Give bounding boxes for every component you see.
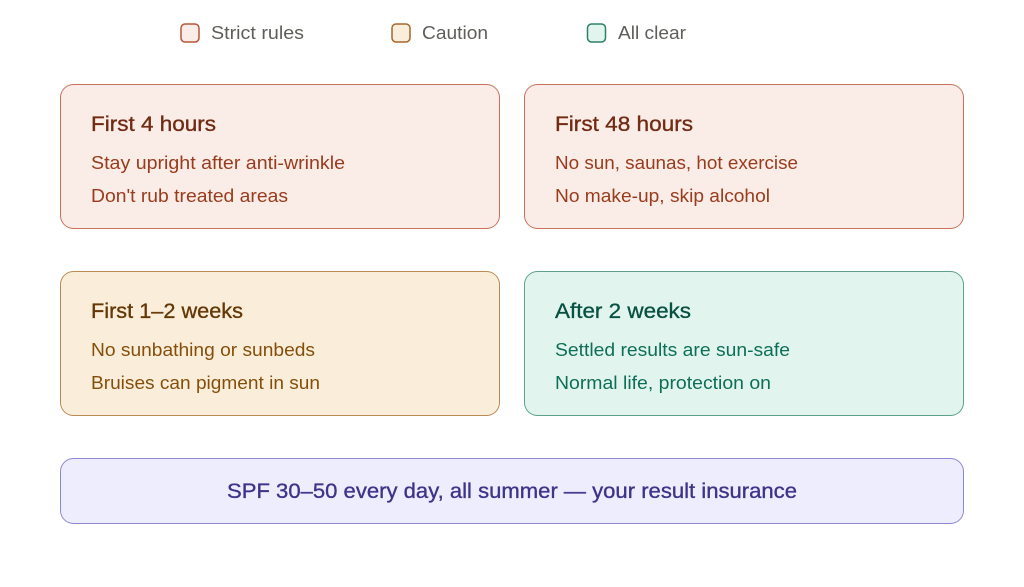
panel: first 1-2 weeks xyxy=(60,272,500,416)
legend item: caution: Caution xyxy=(422,22,488,43)
text: settled results: Settled results are sun-safe xyxy=(555,339,790,360)
panel: after 2 weeks xyxy=(524,272,964,416)
heading: after 2 weeks: After 2 weeks xyxy=(555,299,691,323)
legend item: all clear xyxy=(588,22,686,43)
panel: first 48 hours xyxy=(524,84,964,228)
banner: spf reminder xyxy=(60,458,964,524)
text: don't rub: Don't rub treated areas xyxy=(91,185,288,206)
text: no make-up: No make-up, skip alcohol xyxy=(555,185,770,206)
legend item: caution xyxy=(392,22,488,43)
text: normal life: Normal life, protection on xyxy=(555,372,771,393)
legend xyxy=(181,22,686,43)
legend item: all clear: All clear xyxy=(618,22,686,43)
heading: first 48 hours: First 48 hours xyxy=(555,112,693,136)
legend item: strict rules: Strict rules xyxy=(211,22,304,43)
text: no sun: No sun, saunas, hot exercise xyxy=(555,152,798,173)
text: no sunbathing: No sunbathing or sunbeds xyxy=(91,339,315,360)
heading: first 1-2 weeks: First 1–2 weeks xyxy=(91,299,243,323)
panel: first 4 hours xyxy=(60,84,500,228)
banner text: SPF 30–50 every day, all summer — your result insurance xyxy=(227,479,797,503)
text: stay upright: Stay upright after anti-wrinkle xyxy=(91,152,345,173)
text: bruises: Bruises can pigment in sun xyxy=(91,372,320,393)
heading: first 4 hours: First 4 hours xyxy=(91,112,216,136)
